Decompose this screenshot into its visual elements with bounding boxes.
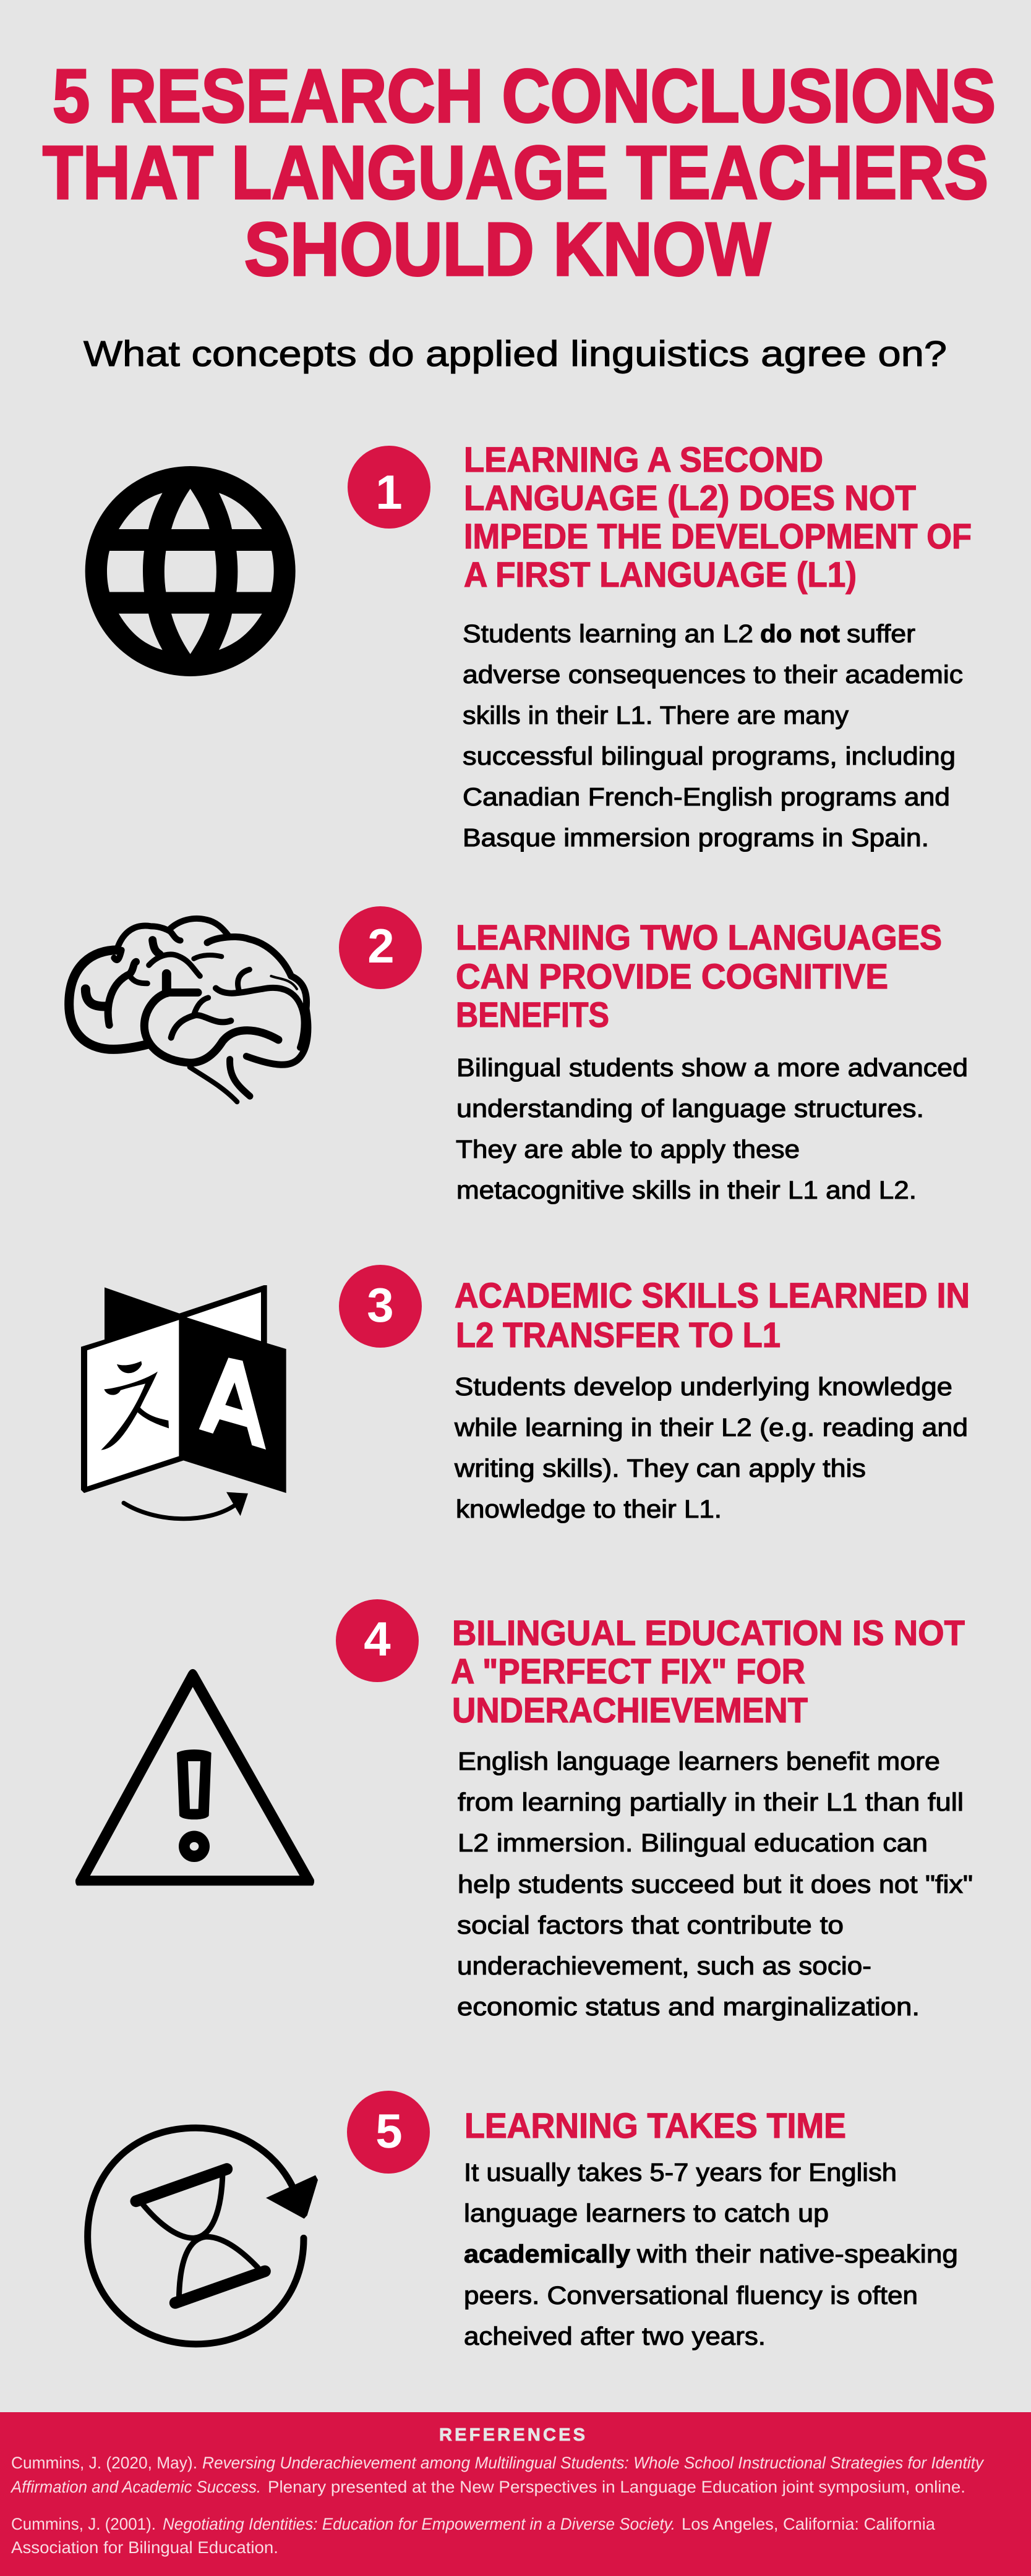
number badge 5: 5 xyxy=(375,2104,403,2158)
reference 2: Los Angeles, California: California xyxy=(682,2515,936,2533)
heading 1: LEARNING A SECOND xyxy=(464,440,823,480)
body text 3: writing skills). They can apply this xyxy=(454,1454,866,1482)
number badge 2 xyxy=(339,906,422,989)
body text 3: Students develop underlying knowledge xyxy=(455,1372,952,1401)
reference 1: Plenary presented at the New Perspectives in Language Education joint symposium, online. xyxy=(268,2478,965,2496)
body text 4: from learning partially in their L1 than full xyxy=(458,1788,964,1816)
body text 4: L2 immersion. Bilingual education can xyxy=(458,1829,928,1857)
heading 4: BILINGUAL EDUCATION IS NOT xyxy=(452,1613,965,1653)
body text 5: peers. Conversational fluency is often xyxy=(464,2281,918,2310)
body text 1: Basque immersion programs in Spain. xyxy=(463,823,929,852)
icon: globe xyxy=(85,466,296,676)
reference 2: Association for Bilingual Education. xyxy=(11,2538,278,2557)
body text 4: help students succeed but it does not "fix" xyxy=(458,1870,973,1898)
number badge 1 xyxy=(348,446,430,529)
heading 4 xyxy=(451,1613,965,1730)
reference 1 xyxy=(10,2454,984,2496)
title xyxy=(43,54,996,291)
body text 1: adverse consequences to their academic xyxy=(463,660,963,689)
heading 1: LANGUAGE (L2) DOES NOT xyxy=(464,478,916,518)
body text 1: skills in their L1. There are many xyxy=(463,701,849,729)
body text 5: language learners to catch up xyxy=(464,2199,829,2227)
heading 5: LEARNING TAKES TIME xyxy=(464,2106,846,2146)
heading 4: UNDERACHIEVEMENT xyxy=(452,1691,808,1730)
heading 3 xyxy=(455,1276,970,1355)
body text 1: Students learning an L2 xyxy=(463,619,753,648)
reference 2 xyxy=(11,2515,936,2557)
heading 2: BENEFITS xyxy=(456,995,609,1035)
icon: hourglass with circular arrow xyxy=(88,2128,318,2344)
panel: conclusion 5 xyxy=(88,2091,958,2350)
body text 1: suffer xyxy=(847,619,915,648)
heading 1 xyxy=(464,440,972,595)
heading 2: LEARNING TWO LANGUAGES xyxy=(456,918,942,958)
body text 4: economic status and marginalization. xyxy=(457,1992,920,2021)
reference 2: Negotiating Identities: Education for Empowerment in a Diverse Society. xyxy=(163,2515,675,2533)
heading 1: IMPEDE THE DEVELOPMENT OF xyxy=(464,517,972,556)
references heading: REFERENCES xyxy=(439,2425,585,2445)
body text 5: It usually takes 5-7 years for English xyxy=(464,2158,897,2187)
number badge 4: 4 xyxy=(364,1612,391,1666)
number badge 2: 2 xyxy=(367,919,395,973)
number badge 3: 3 xyxy=(367,1278,394,1332)
panel: conclusion 2 xyxy=(69,906,968,1204)
body text 2: understanding of language structures. xyxy=(456,1094,924,1123)
body text 2: They are able to apply these xyxy=(456,1135,800,1163)
body text 1 xyxy=(463,619,963,852)
heading 4: A "PERFECT FIX" FOR xyxy=(451,1652,805,1691)
heading 2 xyxy=(456,918,942,1035)
reference 1: Affirmation and Academic Success. xyxy=(10,2478,261,2496)
number badge 3 xyxy=(339,1265,422,1348)
icon: translation book xyxy=(81,1285,286,1519)
body text 1: successful bilingual programs, including xyxy=(463,742,956,770)
body text 3: while learning in their L2 (e.g. reading and xyxy=(454,1413,968,1442)
number badge 4 xyxy=(336,1599,419,1682)
reference 1: Reversing Underachievement among Multilingual Students: Whole School Instructional Strategies for Identity xyxy=(202,2454,984,2472)
body text 2 xyxy=(456,1053,968,1204)
panel: conclusion 3 xyxy=(81,1265,970,1523)
panel: conclusion 1 xyxy=(85,440,972,852)
number badge 1: 1 xyxy=(375,465,403,519)
number badge 5 xyxy=(347,2091,430,2174)
body text 4: underachievement, such as socio- xyxy=(457,1952,871,1980)
body text 4: social factors that contribute to xyxy=(457,1911,844,1939)
panel: references footer xyxy=(0,2412,1031,2576)
body text 4: English language learners benefit more xyxy=(458,1747,940,1775)
reference 2: Cummins, J. (2001). xyxy=(11,2515,156,2533)
body text 1: do not xyxy=(760,619,840,648)
heading 1: A FIRST LANGUAGE (L1) xyxy=(464,555,857,595)
icon: warning triangle xyxy=(75,1669,314,1885)
body text 1: Canadian French-English programs and xyxy=(463,783,950,811)
subtitle: What concepts do applied linguistics agree on? xyxy=(83,334,947,374)
body text 4 xyxy=(457,1747,973,2021)
body text 5 xyxy=(464,2158,958,2350)
heading 2: CAN PROVIDE COGNITIVE xyxy=(456,957,888,997)
body text 3: knowledge to their L1. xyxy=(456,1495,722,1523)
heading 3: ACADEMIC SKILLS LEARNED IN xyxy=(455,1276,970,1316)
body text 2: metacognitive skills in their L1 and L2. xyxy=(456,1176,917,1204)
body text 5: with their native-speaking xyxy=(636,2240,958,2268)
body text 3 xyxy=(454,1372,968,1523)
body text 5: academically xyxy=(464,2240,630,2268)
panel: conclusion 4 xyxy=(75,1599,973,2021)
heading 3: L2 TRANSFER TO L1 xyxy=(456,1316,781,1355)
reference 1: Cummins, J. (2020, May). xyxy=(11,2454,197,2472)
icon: brain xyxy=(69,919,308,1102)
body text 2: Bilingual students show a more advanced xyxy=(456,1053,968,1082)
title: SHOULD KNOW xyxy=(244,207,771,291)
body text 5: acheived after two years. xyxy=(464,2322,766,2350)
